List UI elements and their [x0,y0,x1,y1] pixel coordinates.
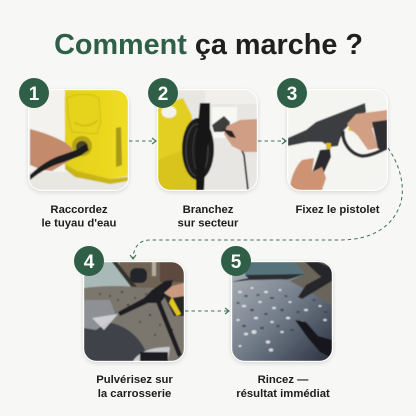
badge: 5 [221,246,251,276]
icon: coiled cable [182,118,214,180]
caption: step 4: la carrosserie [98,388,171,400]
icon: spray gun [118,280,173,316]
panel: step 5 photo [231,261,333,362]
caption: step 3: Fixez le pistolet [295,204,380,216]
badge: 4: 4 [84,252,95,273]
arrow: step 3 to step 4 [130,148,402,259]
arrow: step 4 to step 5 [185,308,229,314]
icon: nozzle [298,276,332,300]
badge: 3: 3 [287,84,297,105]
badge: 4 [74,246,104,276]
icon: water droplets [236,287,327,352]
icon: dark reflection [295,320,332,358]
title: Comment ça marche ? [54,29,363,61]
icon: water spray [92,314,118,330]
caption: step 2: Branchez [183,204,233,216]
panel: step 4 photo [83,261,185,362]
icon: hand with hose [30,129,74,171]
arrow: step 1 to step 2 [129,138,156,144]
caption: step 2: sur secteur [178,218,239,230]
arrow: step 2 to step 3 [258,138,286,144]
icon: yellow washer body [158,98,193,161]
caption: step 4: Pulvérisez sur [96,374,173,386]
panel: step 2 photo [157,89,258,191]
badge: 2 [148,78,178,108]
caption: step 5: résultat immédiat [236,388,330,400]
caption: step 1: le tuyau d'eau [42,218,117,230]
icon: plug and hand [212,116,230,132]
caption: step 1: Raccordez [50,204,108,216]
icon: mud splashes [98,290,174,336]
panel: step 1 photo [28,89,129,191]
icon: nozzle and hand [312,148,332,173]
badge: 1: 1 [29,84,40,105]
badge: 5: 5 [231,252,242,273]
badge: 3 [277,78,307,108]
badge: 2: 2 [158,84,168,105]
icon: spray gun [288,103,387,156]
icon: car hood lower [84,321,146,361]
caption: step 5: Rincez — [258,374,308,386]
icon: yellow pressure washer [64,90,128,179]
panel: step 3 photo [287,89,388,191]
badge: 1 [19,78,49,108]
